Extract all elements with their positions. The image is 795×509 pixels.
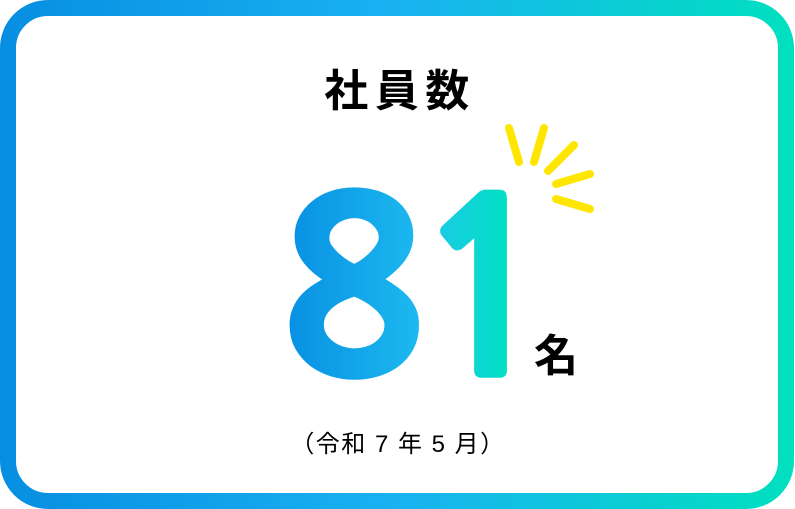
date note: （令和 7 年 5 月）	[290, 431, 506, 458]
unit: 名	[534, 332, 578, 381]
big number 81: 8	[281, 173, 426, 409]
icon: sparkle rays	[509, 128, 590, 209]
big number 81: 1	[413, 174, 557, 409]
title: 社員数	[324, 67, 476, 116]
big number 81	[281, 173, 557, 409]
